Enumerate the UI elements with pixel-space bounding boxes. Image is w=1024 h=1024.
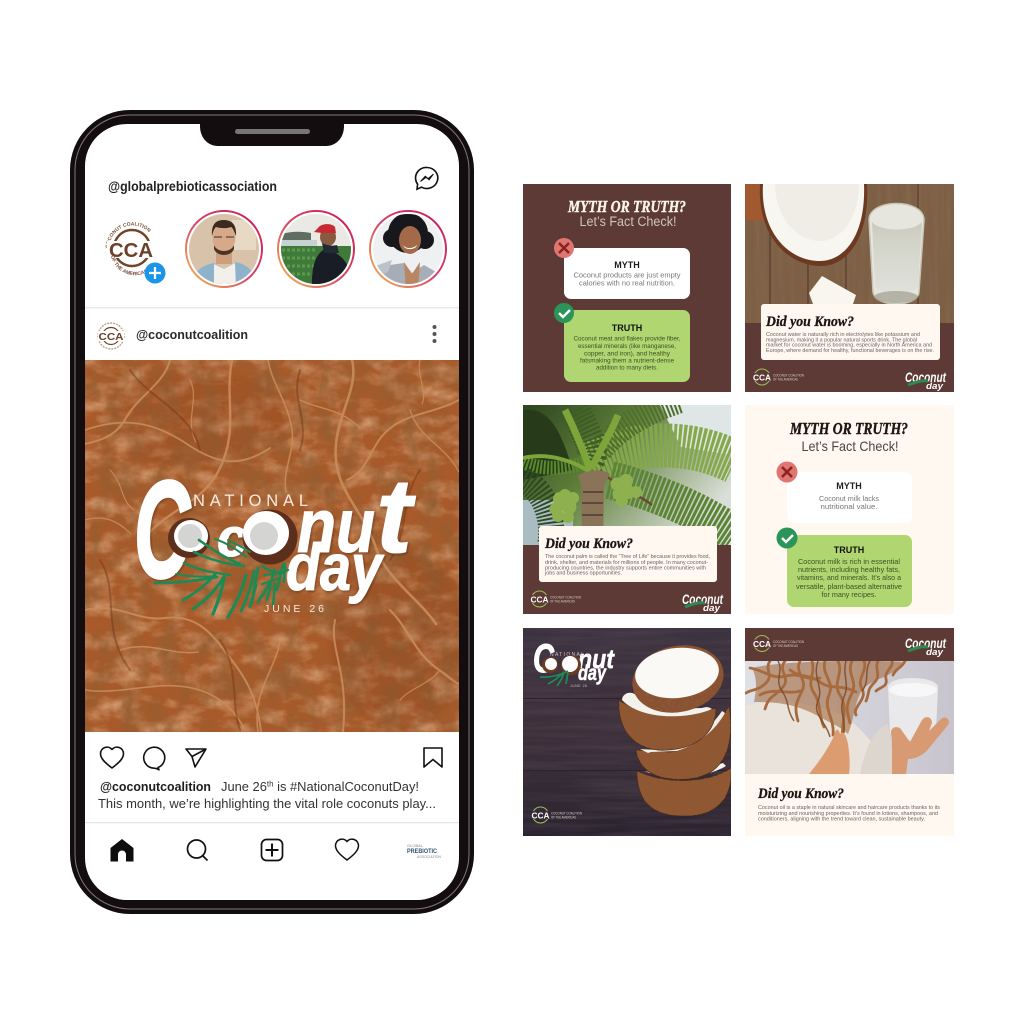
myth card: Coconut milk lacks — [819, 494, 879, 503]
fact text: Did you Know? — [757, 786, 844, 802]
post username: @coconutcoalition — [136, 327, 248, 342]
footer logo: Coconut Day: day — [926, 381, 944, 391]
icon: check — [554, 303, 574, 323]
panel: national coconut day, stacked coconuts — [523, 628, 731, 836]
header logo: Coconut Day — [905, 635, 947, 657]
truth card: copper, and iron), and healthy — [584, 350, 671, 358]
icon: share — [186, 749, 206, 767]
icon: like — [100, 747, 124, 768]
footer logo: CCA: COCONUT COALITION — [773, 374, 804, 378]
coconuts — [550, 474, 642, 523]
icon: more menu — [432, 325, 436, 343]
icon: home — [110, 839, 134, 862]
post avatar: CCA logo — [98, 323, 124, 349]
caption: th — [267, 780, 274, 788]
lettering — [134, 453, 416, 607]
logo: CCA with add-story button: CCA — [109, 240, 153, 262]
header band — [745, 628, 954, 661]
logo: Global Prebiotic Association: PREBIOTIC — [407, 848, 437, 855]
myth card: MYTH — [614, 260, 640, 270]
truth card: fatsmaking them a nutrient-dense — [580, 358, 674, 364]
panel: did you know, coconut oil haircare — [745, 628, 954, 836]
divider — [85, 307, 459, 308]
logo: CCA with add-story button — [106, 222, 166, 284]
footer logo: Coconut Day: day — [703, 603, 721, 613]
right coconut — [242, 510, 298, 564]
icon: cross — [776, 462, 798, 482]
logo: CCA with add-story button: COCONUT COALITION — [106, 222, 151, 248]
logo: Global Prebiotic Association: ASSOCIATION — [417, 854, 441, 859]
truth card: Coconut milk is rich in essential — [798, 557, 900, 566]
story: man in field with red cap — [277, 210, 357, 290]
truth card: addition to many diets. — [596, 364, 658, 372]
fact card: The coconut palm is called the “Tree of Life” because it provides food, — [545, 554, 710, 560]
icon: search — [188, 840, 208, 860]
truth card: Coconut meat and flakes provide fiber, — [574, 336, 681, 342]
logo: Coconut Day: day — [578, 662, 607, 685]
footer logo: CCA: OF THE AMERICAS — [551, 816, 577, 820]
account handle: @globalprebioticassociation — [108, 179, 277, 194]
bottom navigation — [110, 839, 441, 862]
footer logo: Coconut Day — [905, 369, 947, 391]
truth card: for many recipes. — [822, 590, 876, 599]
footer logo: CCA — [530, 591, 581, 607]
lettering: t — [376, 457, 416, 575]
footer logo: CCA: COCONUT COALITION — [550, 596, 581, 600]
truth card — [787, 535, 912, 607]
photo: stacked coconuts on dark wood — [523, 628, 731, 836]
panel: myth or truth, coconut products — [523, 184, 731, 392]
photo: coconut and glass of water — [745, 184, 954, 323]
fact card: Did you Know? — [544, 536, 633, 552]
left coconut — [168, 518, 210, 558]
heading: MYTH OR TRUTH? — [789, 419, 908, 438]
post image: soil and roots — [85, 360, 470, 732]
phone frame — [70, 110, 474, 914]
caption: June 26 — [221, 779, 267, 794]
date: JUNE 26 — [264, 603, 324, 615]
truth card: TRUTH — [612, 323, 642, 333]
logo: Coconut Day — [533, 637, 615, 688]
roots — [85, 360, 459, 732]
truth card: nutrients, including healthy fats, — [798, 565, 900, 574]
third shell — [636, 706, 731, 779]
logo: Coconut Day: nut — [578, 644, 615, 674]
hands — [891, 717, 949, 774]
palm fronds — [155, 539, 288, 617]
icon: cross — [554, 238, 574, 258]
lettering: day — [286, 530, 385, 604]
lettering: C — [134, 453, 191, 607]
header logo: Coconut Day: day — [926, 647, 944, 657]
footer logo: CCA: COCONUT COALITION — [551, 812, 582, 816]
myth card: nutritional value. — [820, 502, 878, 511]
myth card: Coconut products are just empty — [574, 270, 681, 280]
footer logo: CCA: OF THE AMERICAS — [550, 600, 576, 604]
icon: add story — [144, 262, 166, 284]
panel: did you know, coconut water — [745, 184, 954, 392]
subheading: Let’s Fact Check! — [580, 214, 676, 229]
heading: MYTH OR TRUTH? — [567, 197, 686, 216]
story: man with glasses — [185, 210, 265, 290]
header logo: CCA: OF THE AMERICAS — [773, 644, 799, 648]
footer logo: Coconut Day — [682, 591, 724, 613]
myth card — [787, 472, 912, 523]
truth card: versatile, plant-based alternative — [796, 582, 902, 591]
footer logo: CCA: OF THE AMERICAS — [773, 378, 799, 382]
top shell — [632, 645, 724, 713]
footer logo: CCA: CCA — [753, 372, 771, 382]
fronds — [523, 400, 735, 545]
myth card: MYTH — [836, 481, 862, 491]
action bar — [100, 747, 442, 770]
second shell — [619, 700, 716, 750]
logo: Coconut Day: NATIONAL — [550, 652, 584, 658]
truth card: vitamins, and minerals. It’s also a — [797, 573, 902, 582]
header logo: Coconut Day: Coconut — [905, 635, 947, 651]
truth card: TRUTH — [834, 545, 864, 555]
bottom shell — [637, 768, 731, 816]
footer logo: Coconut Day: Coconut — [905, 369, 947, 385]
fact card: Did you Know? — [765, 314, 854, 330]
caption: This month, we’re highlighting the vital role coconuts play... — [98, 796, 436, 811]
footer logo: CCA: CCA — [530, 594, 548, 604]
icon: add — [262, 840, 282, 860]
fact text — [757, 786, 940, 822]
icon: check — [776, 528, 798, 548]
header logo: CCA: CCA — [753, 639, 771, 649]
logo: National Coconut Day — [134, 453, 416, 617]
panel: did you know, tree of life — [523, 400, 735, 614]
hair — [752, 661, 902, 734]
fact card: drink, shelter, and materials for millions of people. In many coconut- — [545, 560, 708, 566]
lettering: nu — [297, 484, 375, 569]
logo: CCA with add-story button: OF THE AMERICAS — [111, 256, 146, 276]
panel: myth or truth, coconut milk — [745, 405, 954, 614]
fact text: conditioners, aligning with the trend toward clean, sustainable beauty. — [758, 816, 925, 822]
divider — [85, 822, 459, 823]
fact card: jobs and business opportunities. — [544, 570, 622, 576]
fact card — [761, 304, 940, 360]
fact card — [539, 526, 717, 582]
fact card: market for coconut water is booming, especially in North America and — [766, 342, 932, 348]
header logo: CCA — [753, 636, 804, 652]
footer logo: Coconut Day: Coconut — [682, 591, 724, 607]
fact card: Coconut water is naturally rich in electrolytes like potassium and — [766, 332, 920, 338]
fact card: Europe, where demand for healthy, functional beverages is on the rise. — [766, 348, 934, 354]
footer logo: CCA — [532, 807, 582, 823]
myth card: calories with no real nutrition. — [579, 278, 675, 288]
logo: Coconut Day: C — [533, 637, 555, 681]
subheading: Let’s Fact Check! — [802, 438, 898, 454]
icon: activity — [336, 839, 358, 860]
icon: comment — [144, 747, 165, 770]
icon: messenger — [416, 167, 438, 189]
caption: is #NationalCoconutDay! — [274, 779, 419, 794]
lettering: c — [217, 508, 247, 568]
jar — [888, 678, 938, 740]
myth card — [564, 248, 690, 299]
fact text: moisturizing and nourishing properties. It’s found in lotions, shampoos, and — [758, 811, 938, 817]
photo: hair and jar — [745, 661, 954, 774]
fact card: producing countries, the industry supports entire communities with — [545, 566, 706, 572]
story: smiling woman in blazer — [369, 210, 449, 292]
icon: save — [424, 748, 442, 767]
caption — [98, 779, 436, 811]
phone mockup — [70, 110, 474, 914]
photo: coconut palm — [523, 400, 735, 546]
truth card: essential minerals (like manganese, — [578, 343, 676, 350]
logo: Global Prebiotic Association — [407, 843, 441, 859]
truth card — [564, 310, 690, 382]
logo: Global Prebiotic Association: GLOBAL — [407, 843, 424, 848]
footer logo: CCA: CCA — [532, 810, 550, 820]
logo: Coconut Day: JUNE 26 — [570, 684, 587, 688]
fact text: Coconut oil is a staple in natural skincare and haircare products thanks to its — [758, 805, 940, 811]
header logo: CCA: COCONUT COALITION — [773, 640, 804, 644]
footer logo: CCA — [753, 369, 804, 385]
fact card: magnesium, making it a popular natural sports drink. The global — [766, 338, 917, 344]
post avatar: CCA logo: CCA — [98, 331, 124, 343]
title: National: NATIONAL — [193, 492, 308, 510]
trunk — [578, 470, 610, 526]
caption: @coconutcoalition — [100, 779, 211, 794]
